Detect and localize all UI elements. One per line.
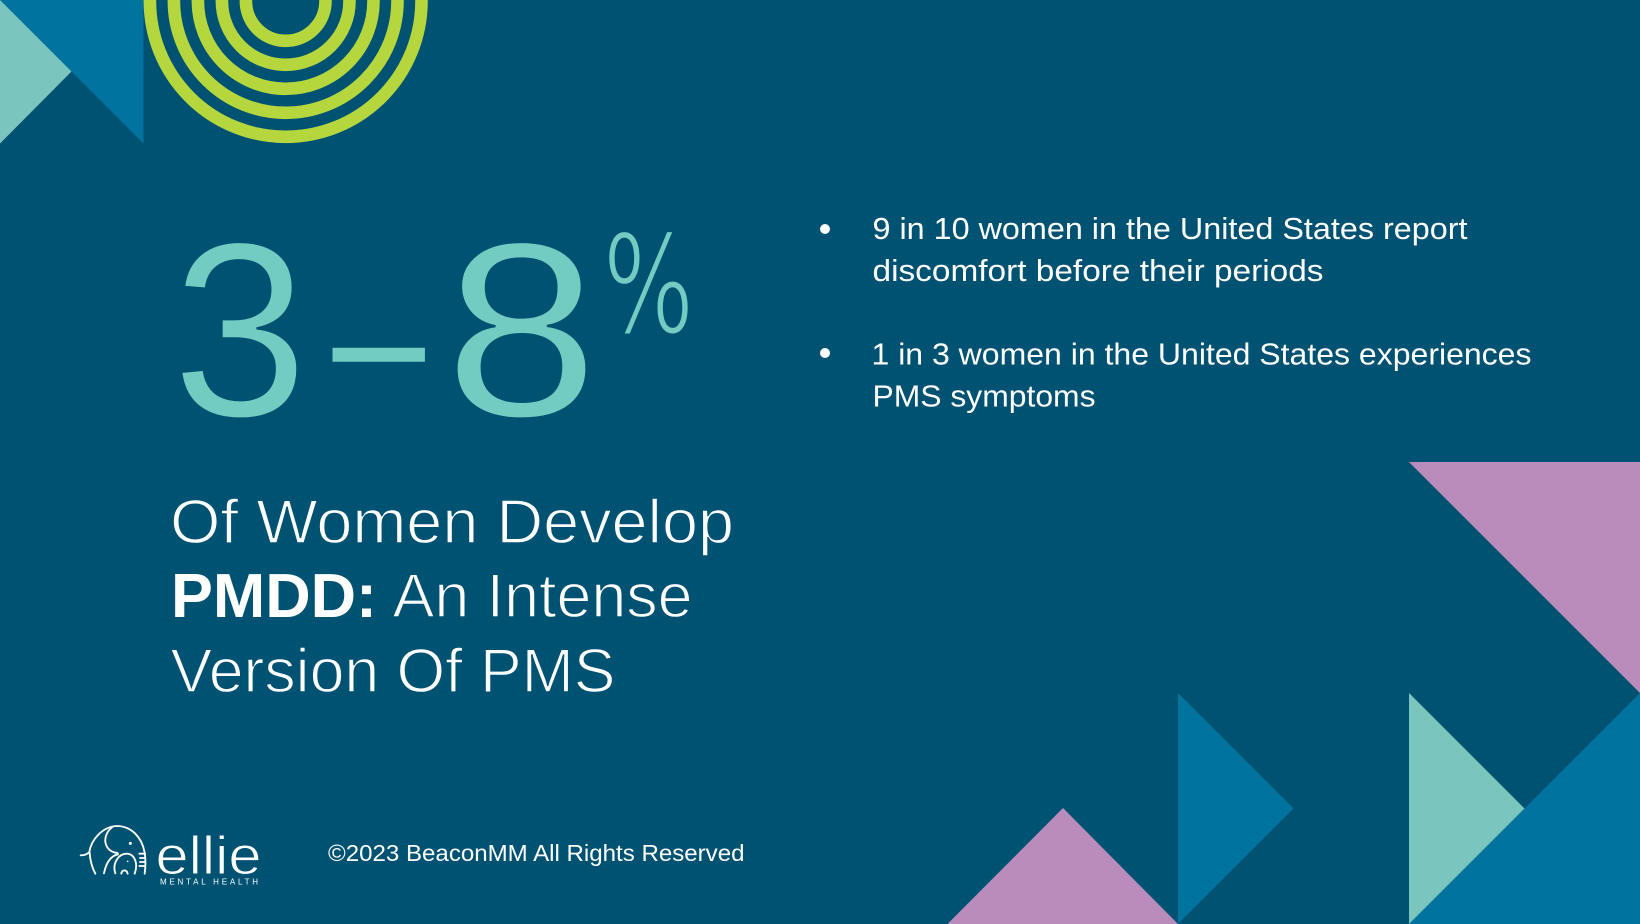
icon: concentric lime half circles: [150, 0, 421, 137]
icon: lower-right teal triangle: [1409, 693, 1524, 924]
copyright: ©2023 BeaconMM All Rights Reserved: [328, 840, 744, 866]
bullet 1: [820, 212, 1468, 288]
icon: lower-right blue triangle: [1409, 693, 1640, 924]
heading: Of Women Develop PMDD: An Intense Version Of PMS: PMDD:: [171, 562, 377, 631]
icon: right purple triangle: [1409, 462, 1640, 693]
icon: middle blue triangle: [1178, 693, 1294, 924]
big statistic: 3–8%: –: [332, 218, 425, 453]
logo: ellie mental health: [81, 826, 262, 886]
bullet 2: PMS symptoms: [872, 380, 1096, 414]
bullet list: [820, 212, 1532, 414]
bullet 2: 1 in 3 women in the United States experiences: [872, 338, 1532, 372]
bullet 2: [820, 338, 1532, 414]
big statistic: 3–8%: %: [603, 205, 694, 366]
big statistic: 3–8%: [172, 191, 694, 469]
bullet 1: 9 in 10 women in the United States report: [872, 212, 1468, 246]
big statistic: 3–8%: 8: [444, 191, 598, 469]
wordmark: mental health: MENTAL HEALTH: [160, 878, 258, 886]
bullet 1: discomfort before their periods: [872, 254, 1324, 288]
heading: Of Women Develop PMDD: An Intense Version Of PMS: An Intense: [392, 562, 692, 631]
icon: bottom purple triangle: [948, 808, 1178, 924]
heading: Of Women Develop PMDD: An Intense Version Of PMS: [170, 488, 734, 706]
icon: elephant and calf: [81, 826, 145, 874]
wordmark: ellie: ellie: [156, 826, 262, 886]
heading: Of Women Develop PMDD: An Intense Version Of PMS: Of Women Develop: [170, 488, 734, 557]
big statistic: 3–8%: 3: [172, 191, 308, 469]
heading: Of Women Develop PMDD: An Intense Version Of PMS: Version Of PMS: [170, 637, 616, 706]
icon: top-left triangles: [0, 0, 144, 144]
